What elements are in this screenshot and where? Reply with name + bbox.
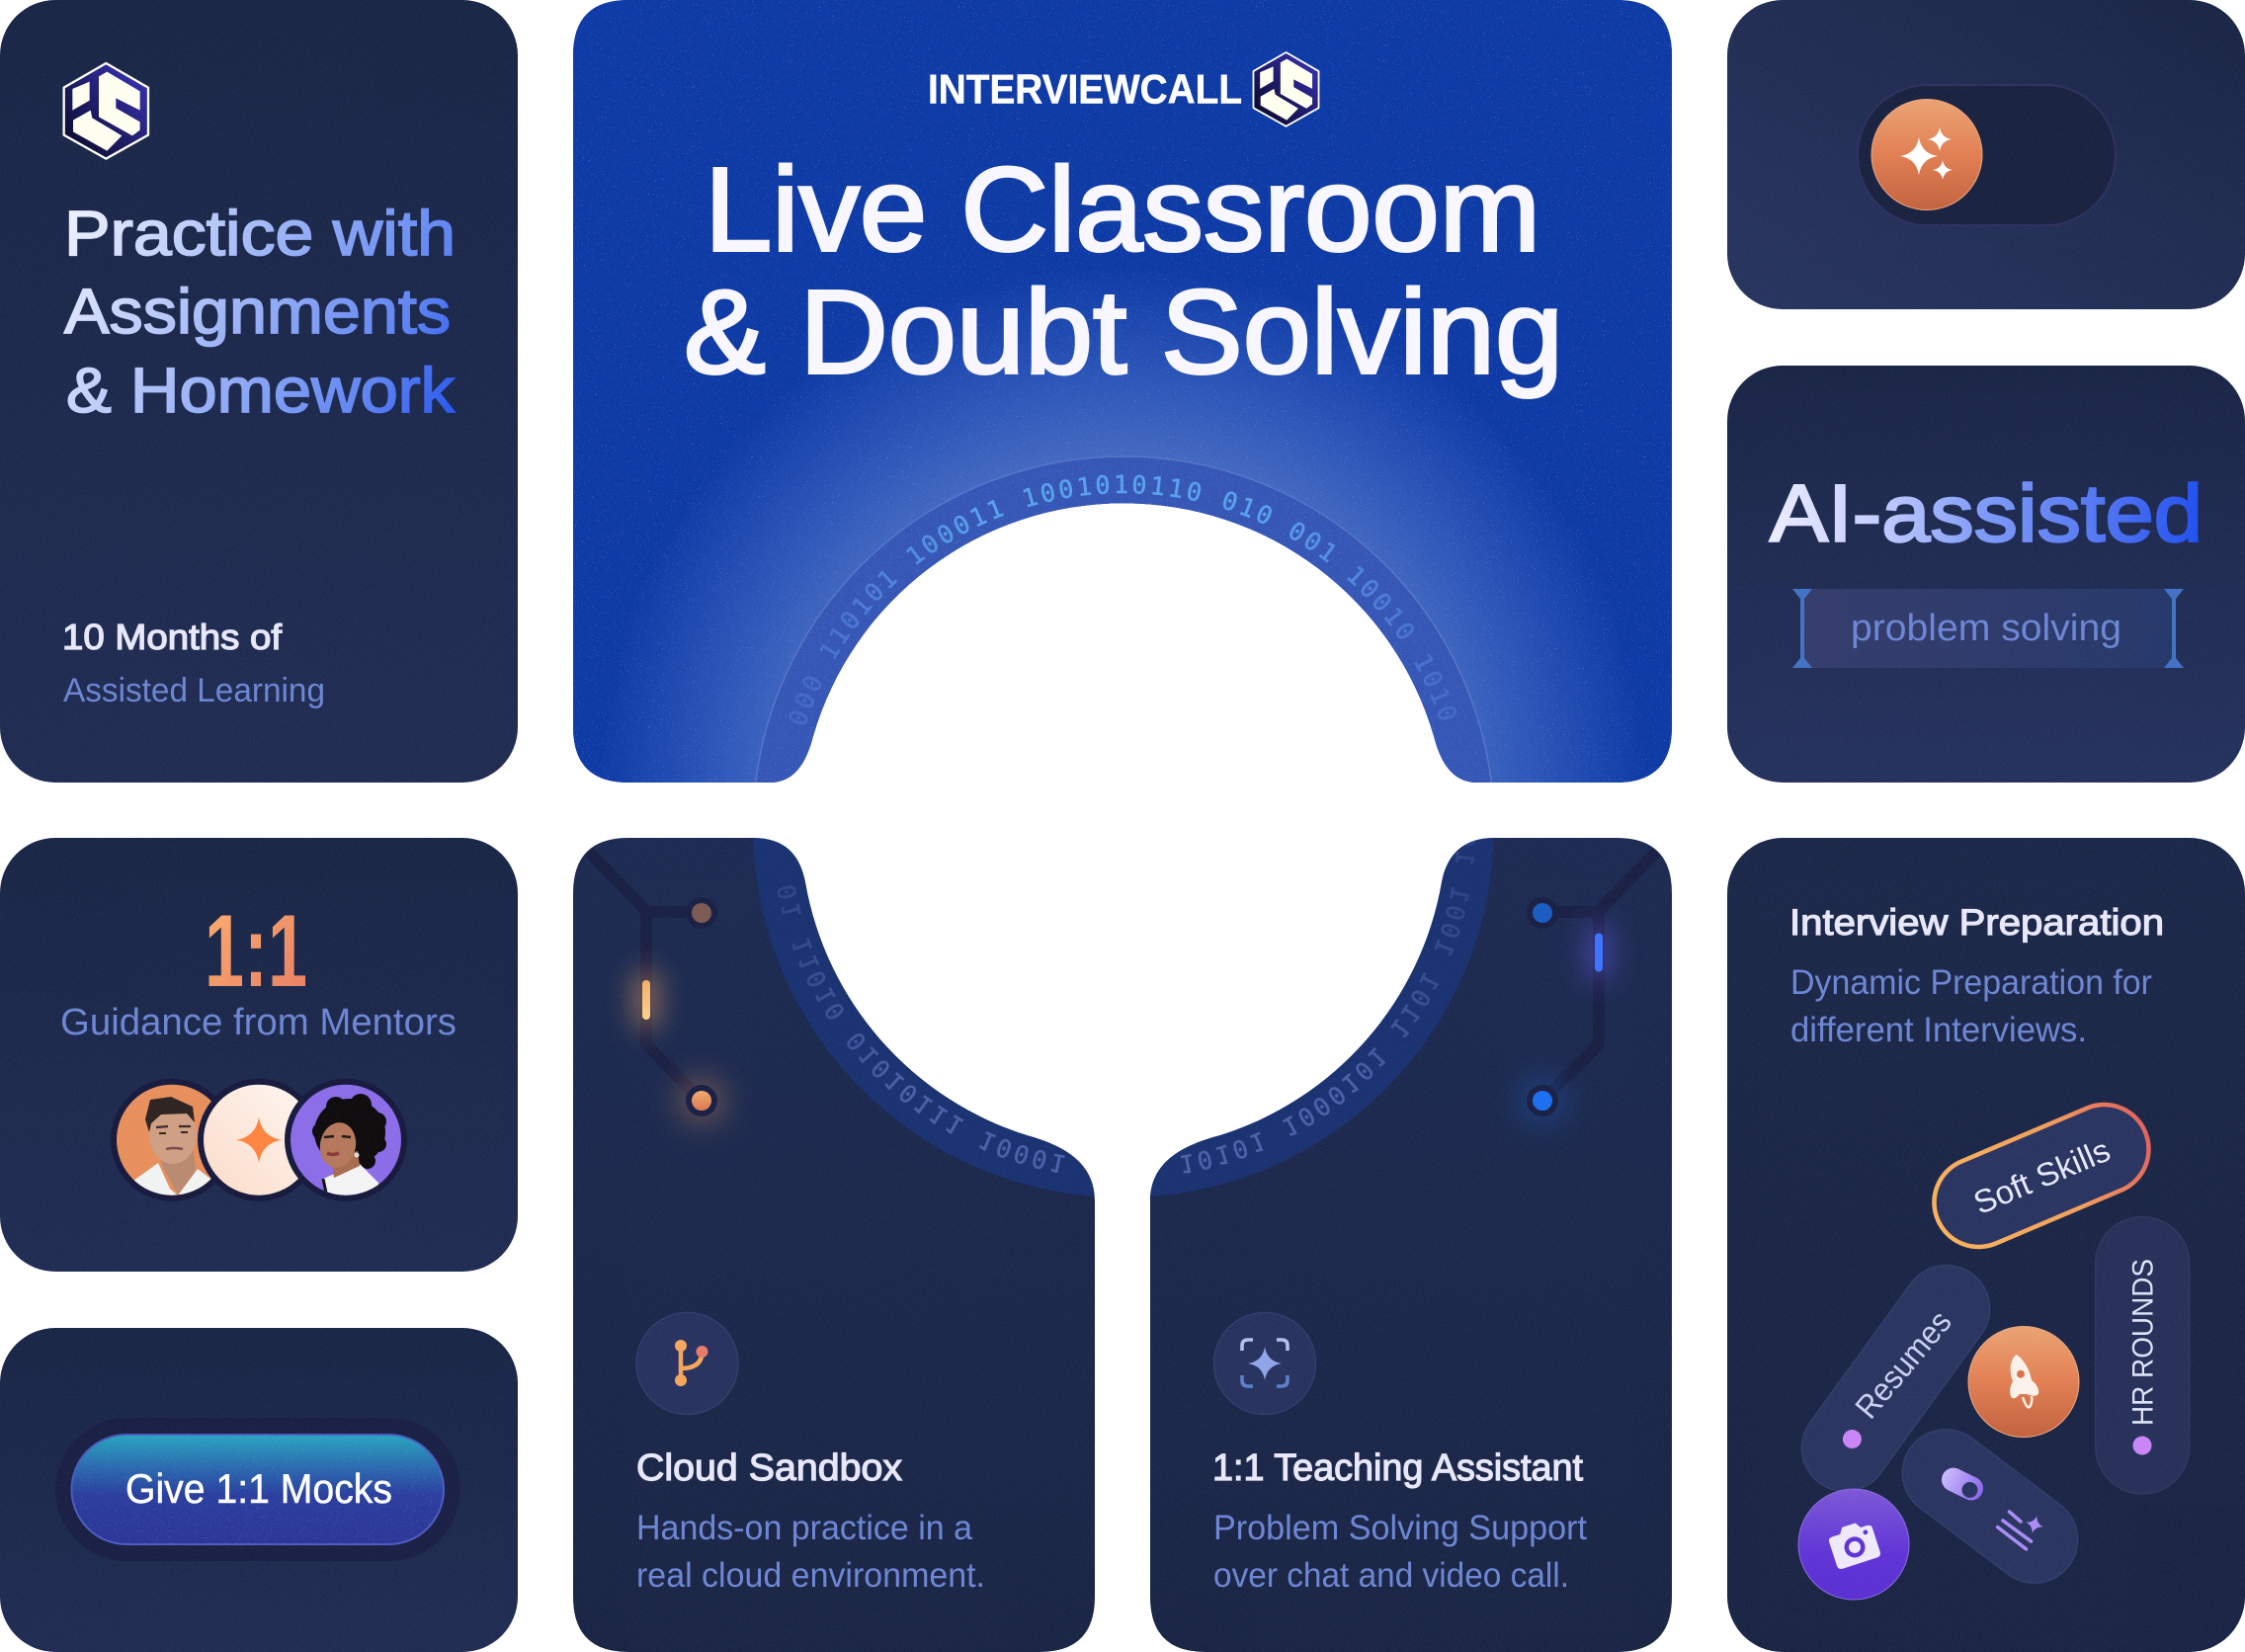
pill: resumes	[1785, 1248, 2007, 1509]
text: 10 months of assisted learning	[62, 617, 325, 709]
heading: 1:1: 1:1	[205, 894, 307, 1009]
panel: ai toggle	[1727, 0, 2245, 309]
text: cloud sandbox: Hands-on practice in a	[636, 1509, 973, 1547]
avatar: female mentor	[285, 1079, 407, 1201]
avatar: orange star	[198, 1079, 320, 1201]
pill: hr rounds: HR ROUNDS	[2127, 1259, 2160, 1426]
pill: hr rounds	[2096, 1217, 2190, 1494]
text: cloud sandbox	[636, 1447, 985, 1595]
text: guidance from mentors: Guidance from Mentors	[60, 1002, 457, 1043]
text: 10 months of assisted learning: 10 Months of	[62, 617, 283, 657]
selection box: problem solving: problem solving	[1851, 608, 2121, 649]
toggle knob with sparkles	[1871, 99, 1982, 209]
panel: give 1:1 mocks	[0, 1328, 518, 1652]
title: live classroom and doubt solving: Live Classroom	[705, 142, 1540, 277]
selection box: problem solving	[1792, 589, 2184, 668]
panel: 1:1 teaching assistant	[1150, 838, 1672, 1652]
heading: practice with assignments and homework: & Homework	[66, 355, 456, 426]
icon: git branch	[636, 1312, 738, 1415]
button well	[55, 1418, 460, 1561]
pill: soft skills	[1920, 1091, 2163, 1261]
text: 1:1 teaching assistant: 1:1 Teaching Assistant	[1212, 1447, 1583, 1489]
title: live classroom and doubt solving	[684, 142, 1563, 399]
brand: interviewcall wordmark and logo	[928, 52, 1319, 126]
panel: cloud sandbox	[573, 838, 1095, 1652]
text: 1:1 teaching assistant: Problem Solving Support	[1213, 1509, 1587, 1547]
text: interview preparation: Interview Preparation	[1789, 902, 2164, 943]
text: 10 months of assisted learning: Assisted Learning	[63, 672, 325, 709]
panel: 1:1 guidance from mentors	[0, 838, 518, 1272]
button: give 1:1 mocks	[71, 1435, 444, 1544]
icon: rocket orb	[1968, 1326, 2079, 1437]
avatar: male mentor	[111, 1079, 215, 1201]
circuit trace: blue	[1517, 852, 1656, 1126]
button: give 1:1 mocks: Give 1:1 Mocks	[125, 1465, 392, 1512]
icon: ai focus sparkle	[1213, 1312, 1316, 1415]
heading: ai-assisted: AI-assisted	[1770, 468, 2203, 559]
binary arc band: 10101 1000101 1101 1001 10	[1181, 840, 1476, 1174]
text: interview preparation: Dynamic Preparation for	[1790, 963, 2152, 1002]
text: 1:1 teaching assistant: over chat and video call.	[1213, 1556, 1569, 1595]
heading: practice with assignments and homework: Practice with	[64, 198, 456, 269]
icon: camera orb	[1798, 1489, 1909, 1600]
text: cloud sandbox: real cloud environment.	[636, 1556, 985, 1595]
pill: soft skills: Soft Skills	[1968, 1131, 2116, 1221]
panel: interview preparation	[1727, 838, 2245, 1652]
panel: live classroom hero	[573, 0, 1672, 783]
binary arc band: 01 11010 01010111 10001	[777, 885, 1065, 1174]
panel: ai-assisted problem solving	[1727, 366, 2245, 783]
text: interview preparation	[1789, 902, 2164, 1049]
text: cloud sandbox: Cloud Sandbox	[636, 1447, 902, 1489]
heading: practice with assignments and homework: Assignments	[64, 276, 451, 347]
pill: resumes: Resumes	[1848, 1303, 1958, 1425]
pill: toggle and sparkle	[1885, 1412, 2095, 1601]
brand: interviewcall wordmark and logo: INTERVIEWCALL	[928, 65, 1242, 113]
heading: practice with assignments and homework	[64, 198, 456, 426]
icon: interviewcall logo	[64, 63, 148, 159]
text: 1:1 teaching assistant	[1212, 1447, 1587, 1595]
panel: practice with assignments	[0, 0, 518, 783]
title: live classroom and doubt solving: & Doubt Solving	[684, 265, 1563, 399]
binary arc band: 000 110101 100011 1001010110 010 001 10010 1010	[789, 474, 1456, 725]
toggle track	[1858, 85, 2116, 225]
circuit trace: orange	[589, 852, 727, 1126]
text: interview preparation: different Interviews.	[1790, 1011, 2087, 1049]
